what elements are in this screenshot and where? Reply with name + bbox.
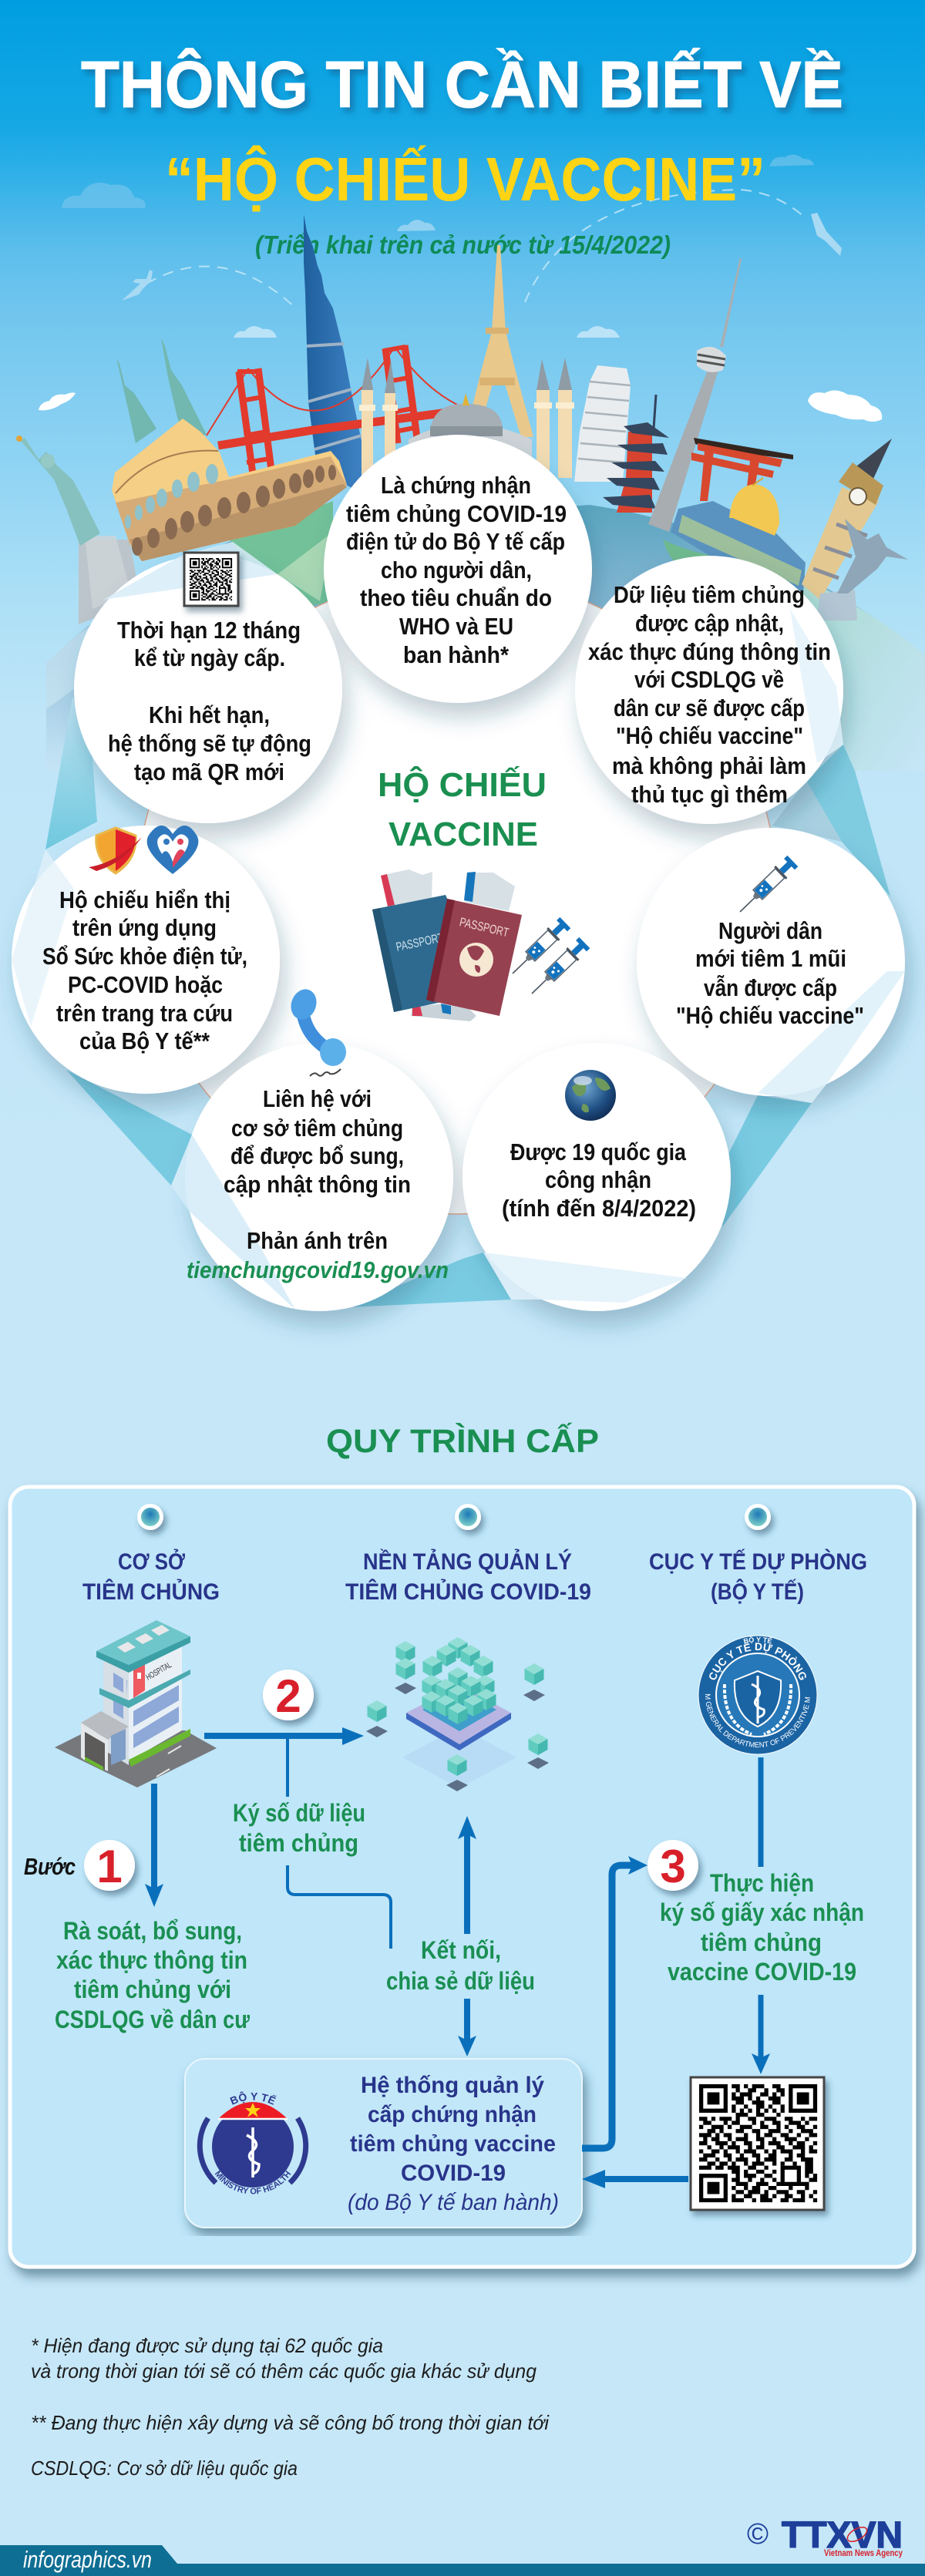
column heading: vaccination site: CƠ SỞ [118, 1549, 185, 1575]
bubble: validity: Thời hạn 12 tháng [117, 617, 301, 644]
landmark: Big Ben [802, 439, 892, 600]
bubble: single dose: Người dân [718, 917, 822, 944]
label: review data [55, 1917, 251, 2033]
tickets [381, 869, 515, 1021]
bubble: certificate definition: WHO và EU [399, 613, 513, 640]
logo: TTXVN: © [747, 2518, 769, 2551]
column heading: department [649, 1549, 867, 1605]
label: management system [348, 2073, 559, 2215]
bubble: single dose: vẫn được cấp [704, 974, 837, 1001]
bubble: data update [588, 581, 831, 808]
bubble: data update: "Hộ chiếu vaccine" [616, 722, 803, 749]
panel: management system [185, 2059, 582, 2228]
label: digital signing: tiêm chủng [239, 1829, 358, 1857]
bubble: single dose: mới tiêm 1 mũi [695, 945, 846, 972]
landmark: pagoda [603, 395, 669, 513]
bubble: contact: tiemchungcovid19.gov.vn [187, 1256, 449, 1283]
column heading: platform: NỀN TẢNG QUẢN LÝ [363, 1549, 572, 1575]
bubble: validity: tạo mã QR mới [134, 758, 284, 785]
bubble: contact [187, 1085, 449, 1283]
label: digitally sign: tiêm chủng [701, 1929, 822, 1956]
bubble: certificate definition: cho người dân, [381, 557, 532, 583]
globe [46, 501, 925, 771]
column heading: department: CỤC Y TẾ DỰ PHÒNG [649, 1549, 867, 1575]
landmark: Statue of Liberty [16, 435, 140, 624]
landmark: Petronas Towers [116, 338, 207, 443]
bubble: display in apps: của Bộ Y tế** [79, 1027, 210, 1054]
step badge 3: 3 [660, 1841, 686, 1892]
bubble: recognition [502, 1138, 696, 1222]
label: digitally sign: vaccine COVID-19 [668, 1958, 856, 1986]
translucent ribbon overlays on bubbles [12, 542, 905, 1310]
landmark: Burj Khalifa [304, 214, 362, 493]
label: Bước: Bước [24, 1853, 76, 1880]
step badge 1 [84, 1840, 135, 1892]
label: digitally sign [660, 1869, 864, 1986]
bubble: display in apps: Hộ chiếu hiển thị [59, 886, 230, 913]
airplane flight paths [146, 190, 806, 310]
bubble: certificate definition [346, 472, 567, 668]
bubble: contact: cập nhật thông tin [224, 1171, 411, 1198]
column markers [137, 1504, 771, 1530]
arrow: connect up and down [458, 1816, 476, 2056]
bubble: single dose [676, 917, 864, 1029]
column heading: department: (BỘ Y TẾ) [711, 1579, 804, 1605]
icon: preventive medicine department seal: BỘ Y TẾ [743, 1636, 772, 1643]
landmark: torii gate [691, 438, 793, 501]
arrow: to QR [752, 1995, 770, 2074]
subtitle: (Triển khai trên cả nước từ 15/4/2022) [255, 230, 671, 259]
bubble: contact: cơ sở tiêm chủng [231, 1115, 403, 1142]
landmark: mosque [409, 393, 532, 462]
airplanes [122, 213, 842, 301]
label: connect and share: Kết nối, [421, 1936, 501, 1964]
connector: department to step 3 text [758, 1757, 763, 1867]
section heading: process: QUY TRÌNH CẤP [326, 1423, 599, 1460]
label: PASSPORT [458, 916, 510, 940]
label: digital signing: Ký số dữ liệu [233, 1799, 365, 1827]
center heading [378, 765, 547, 853]
central white disc [137, 574, 777, 1214]
info bubbles (white circles) [12, 435, 905, 1311]
bubble: data update: được cập nhật, [635, 610, 784, 637]
icon: preventive medicine department seal: CỤC Y TẾ DỰ PHÒNG [709, 1641, 806, 1680]
landmark: Dome of the Rock [671, 478, 806, 594]
step badge 3 [648, 1840, 698, 1892]
title line 1: THÔNG TIN CẦN BIẾT VỀ [81, 48, 843, 122]
footer bar: infographics.vn [23, 2546, 152, 2573]
footnotes: và trong thời gian tới sẽ có thêm các quốc gia khác sử dụng [31, 2359, 537, 2383]
bubble: display in apps: PC-COVID hoặc [68, 971, 223, 998]
label: review data: Rà soát, bổ sung, [63, 1917, 242, 1945]
icon: hospital: HOSPITAL [145, 1660, 173, 1683]
arrow: step 1 [145, 1784, 163, 1907]
panel: process [10, 1487, 914, 2267]
footnotes [31, 2334, 550, 2480]
bubble: display in apps [42, 886, 247, 1054]
label: review data: tiêm chủng với [74, 1976, 231, 2003]
icon: hospital [55, 1620, 217, 1787]
column heading: vaccination site: TIÊM CHỦNG [82, 1579, 220, 1605]
bubble: validity: hệ thống sẽ tự động [108, 730, 311, 757]
label: review data: xác thực thông tin [56, 1946, 247, 1974]
icon: telephone [287, 986, 346, 1076]
step badge 2 [263, 1670, 314, 1722]
bubble: contact: Phản ánh trên [247, 1227, 388, 1254]
landmark: minarets left [359, 358, 398, 478]
bubble: contact: để được bổ sung, [230, 1142, 404, 1169]
arrow: step 2 to platform [204, 1727, 364, 1745]
label: review data: CSDLQG về dân cư [55, 2006, 251, 2033]
small QR code [184, 553, 238, 606]
bubble: data update: Dữ liệu tiêm chủng [614, 581, 805, 608]
icon: Ministry of Health logo [197, 2091, 308, 2194]
column heading: platform [345, 1549, 591, 1605]
footnotes: ** Đang thực hiện xây dựng và sẽ công bố trong thời gian tới [31, 2411, 550, 2434]
label: management system: tiêm chủng vaccine [350, 2131, 556, 2157]
step badge 2: 2 [275, 1670, 301, 1722]
bubble: validity: kể từ ngày cấp. [134, 644, 285, 671]
icon: Ministry of Health logo: BỘ Y TẾ [230, 2091, 278, 2105]
bubble: display in apps: Sổ Sức khỏe điện tử, [42, 943, 247, 970]
label: management system: Hệ thống quản lý [361, 2073, 544, 2098]
connector: digital signing to link text [288, 1736, 391, 1949]
bubble: recognition: (tính đến 8/4/2022) [502, 1195, 696, 1222]
label: PASSPORT [395, 931, 445, 954]
logo: TTXVN: Vietnam News Agency [824, 2549, 903, 2558]
landmark: Colosseum [112, 419, 347, 561]
label: digitally sign: ký số giấy xác nhận [660, 1898, 864, 1926]
center heading: HỘ CHIẾU [378, 765, 547, 804]
landmark: Golden Gate Bridge [207, 345, 466, 474]
bubble: certificate definition: ban hành* [403, 641, 510, 668]
column heading: platform: TIÊM CHỦNG COVID-19 [345, 1579, 591, 1605]
bubble: contact: Liên hệ với [263, 1085, 372, 1112]
bubble: display in apps: trên ứng dụng [72, 914, 217, 941]
label: connect and share [386, 1936, 535, 1995]
icon: Ministry of Health logo: MINISTRY OF HEALTH [214, 2171, 291, 2194]
bubble: data update: mà không phải làm [612, 752, 806, 779]
icon: earth [565, 1070, 616, 1121]
label: management system: COVID-19 [401, 2161, 506, 2186]
bubble: certificate definition: Là chứng nhận [381, 472, 531, 499]
bubble: recognition: Được 19 quốc gia [510, 1138, 687, 1165]
bubble: data update: dân cư sẽ được cấp [614, 694, 805, 721]
label: digital signing [233, 1799, 365, 1857]
icon: passports [372, 869, 522, 1021]
icon: preventive medicine department seal: VIETNAM GENERAL DEPARTMENT OF PREVENTIVE MEDICINE [705, 1694, 810, 1747]
bubble: data update: với CSDLQG về [634, 666, 784, 693]
label: management system: cấp chứng nhận [368, 2102, 536, 2127]
bubble: validity: Khi hết hạn, [149, 701, 270, 728]
step badge 1: 1 [96, 1841, 123, 1892]
clouds [39, 154, 882, 422]
footnotes: CSDLQG: Cơ sở dữ liệu quốc gia [31, 2457, 298, 2480]
ribbon facets around the central shape [45, 697, 890, 1307]
arrow: QR to system [582, 2170, 688, 2188]
arrow: step 3 [582, 1856, 648, 2148]
bubble: validity [108, 617, 311, 785]
label: management system: (do Bộ Y tế ban hành) [348, 2190, 559, 2215]
bubble: data update: xác thực đúng thông tin [588, 638, 831, 665]
bubble: recognition: công nhận [545, 1166, 651, 1193]
bubble: certificate definition: tiêm chủng COVID-19 [346, 500, 567, 527]
bubble: certificate definition: theo tiêu chuẩn do [360, 584, 552, 611]
icon: blockchain platform [366, 1637, 549, 1791]
logo: TTXVN: TTXVN [782, 2515, 903, 2556]
label: connect and share: chia sẻ dữ liệu [386, 1967, 535, 1995]
icon: syringe [734, 855, 799, 918]
large QR code [691, 2077, 824, 2210]
title line 2: “HỘ CHIẾU VACCINE” [165, 145, 765, 214]
landmark: minarets right [534, 358, 574, 478]
landmark: Eiffel Tower [464, 245, 533, 439]
landmark: Tower of Pisa [574, 365, 631, 482]
icon: syringes [506, 916, 590, 1000]
center heading: VACCINE [388, 816, 538, 853]
landmark: CN Tower [648, 257, 742, 532]
column heading: vaccination site [82, 1549, 220, 1605]
bubble: single dose: "Hộ chiếu vaccine" [676, 1002, 864, 1029]
icon: health apps [89, 826, 198, 874]
footer bar [0, 2545, 925, 2576]
landmark: Christ the Redeemer [816, 519, 908, 620]
bubble: certificate definition: điện tử do Bộ Y tế cấp [346, 528, 565, 555]
icon: preventive medicine department seal [698, 1636, 817, 1754]
label: digitally sign: Thực hiện [710, 1869, 814, 1897]
footnotes: * Hiện đang được sử dụng tại 62 quốc gia [31, 2334, 383, 2357]
bubble: data update: thủ tục gì thêm [631, 781, 788, 808]
bubble: display in apps: trên trang tra cứu [56, 1000, 233, 1027]
